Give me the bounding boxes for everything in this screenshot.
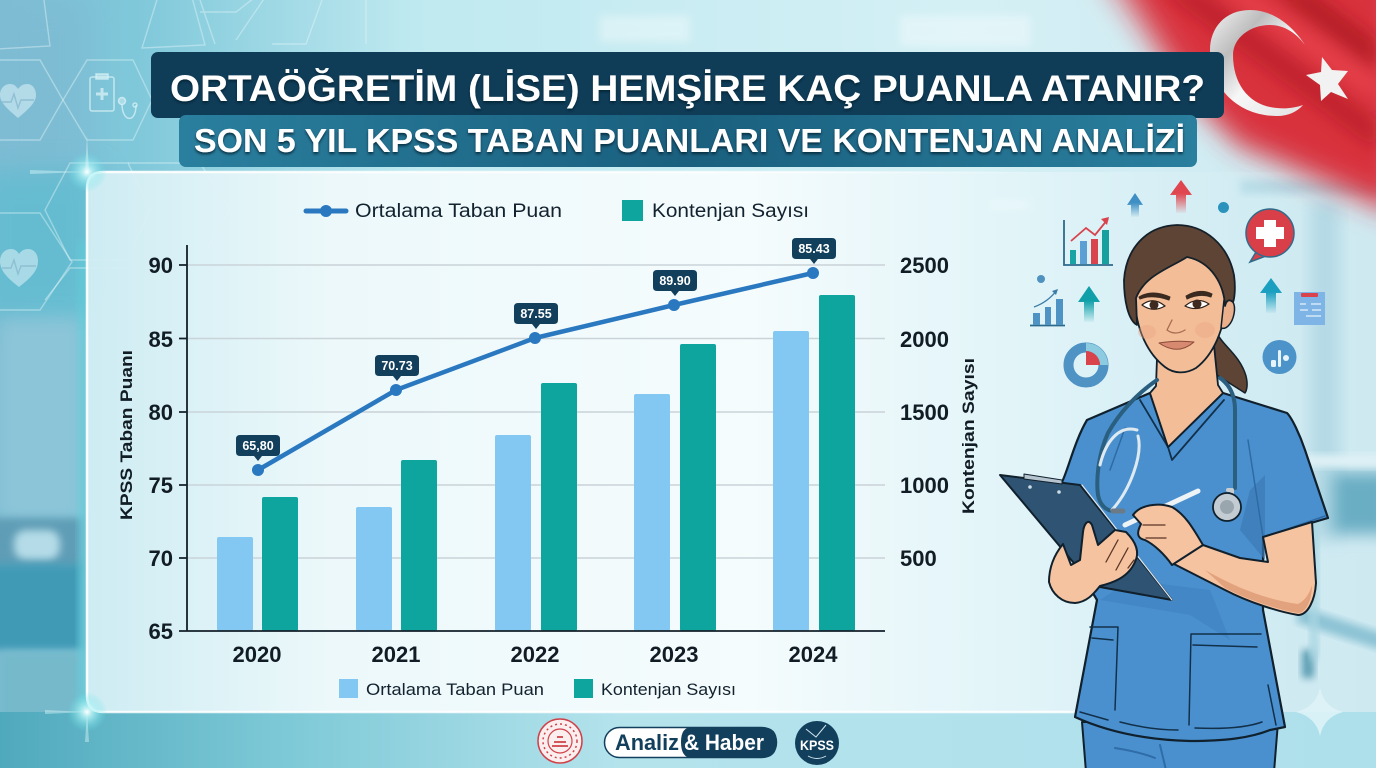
right axis title: Kontenjan Sayısı xyxy=(959,358,978,514)
logo: Analiz & Haber: Analiz xyxy=(615,730,679,755)
right axis values: 500 xyxy=(900,546,937,571)
left axis values: 70 xyxy=(149,546,173,571)
year labels: 2020 xyxy=(233,642,281,667)
bars: 2022 xyxy=(495,383,577,631)
top legend: Ortalama Taban Puan xyxy=(355,201,562,222)
hexagon medical pattern xyxy=(0,0,366,310)
icon: report document xyxy=(1294,292,1325,325)
chart panel xyxy=(30,135,1297,742)
pen xyxy=(1125,491,1198,525)
ponytail xyxy=(1211,333,1247,393)
floating analytics icons xyxy=(1030,180,1325,382)
facial features xyxy=(1138,291,1215,349)
bottom legend: Kontenjan Sayısı xyxy=(601,680,736,699)
value callouts: 85.43 xyxy=(798,242,830,256)
left axis values: 75 xyxy=(149,473,173,498)
collar xyxy=(1140,393,1224,460)
left axis values xyxy=(149,253,173,644)
logos xyxy=(538,719,839,765)
right axis values: 2500 xyxy=(900,253,949,278)
title banner: ORTAÖĞRETİM (LİSE) HEMŞİRE KAÇ PUANLA ATANIR? xyxy=(170,68,1205,109)
bars: 2020 xyxy=(217,497,298,631)
icon: heart with pulse xyxy=(0,84,38,287)
logo: Analiz & Haber: & Haber xyxy=(684,730,764,755)
top legend: Kontenjan Sayısı xyxy=(652,201,809,222)
right axis values xyxy=(900,253,949,571)
stethoscope xyxy=(1097,378,1241,521)
pants xyxy=(1082,722,1278,768)
title banner xyxy=(151,52,1224,167)
right axis values: 1000 xyxy=(900,473,949,498)
top legend xyxy=(306,200,809,222)
scrub top xyxy=(1055,393,1328,741)
left axis values: 65 xyxy=(149,619,173,644)
writing hand xyxy=(1133,505,1203,565)
value callouts: 89.90 xyxy=(659,274,691,288)
sparkle xyxy=(1296,688,1343,736)
ear xyxy=(1221,299,1235,328)
year labels: 2021 xyxy=(372,642,420,667)
year labels: 2022 xyxy=(511,642,559,667)
icon: round data badge xyxy=(1262,340,1296,374)
nurse illustration xyxy=(1000,225,1328,768)
logo: KPSS badge: KPSS xyxy=(800,737,834,753)
year labels: 2023 xyxy=(650,642,698,667)
pockets xyxy=(1080,627,1276,730)
year labels: 2024 xyxy=(789,642,838,667)
value callouts: 87.55 xyxy=(520,307,552,321)
arm shading xyxy=(1205,570,1312,613)
icon: teal up arrow xyxy=(1078,286,1100,322)
logo: Analiz & Haber xyxy=(604,727,777,758)
neck and chest skin xyxy=(1150,345,1223,447)
crescent xyxy=(1210,10,1305,116)
bottom band xyxy=(0,712,1376,768)
bottom legend: Ortalama Taban Puan xyxy=(366,680,544,699)
left arm and hand xyxy=(1049,522,1137,603)
icon: donut chart xyxy=(1068,343,1108,382)
combo chart: scores and quotas xyxy=(117,238,978,667)
icon: small growth chart xyxy=(1030,275,1065,326)
left axis values: 90 xyxy=(149,253,173,278)
value callouts: 65,80 xyxy=(242,439,274,453)
value callouts xyxy=(236,238,836,461)
axes xyxy=(179,245,885,631)
left axis values: 80 xyxy=(149,400,173,425)
right arm xyxy=(1172,522,1316,615)
hair xyxy=(1124,225,1235,325)
bars: 2024 xyxy=(773,295,855,631)
logo: ministry seal xyxy=(538,719,582,763)
subtitle banner xyxy=(179,115,1197,167)
value callouts: 70.73 xyxy=(381,359,413,373)
icon: bar chart with red arrow xyxy=(1064,217,1113,265)
icon: cyan up arrow xyxy=(1260,278,1282,313)
score line xyxy=(252,267,819,476)
subtitle banner: SON 5 YIL KPSS TABAN PUANLARI VE KONTENJAN ANALİZİ xyxy=(194,122,1185,159)
star xyxy=(1306,57,1348,101)
bars: 2021 xyxy=(356,460,437,631)
face xyxy=(1135,256,1226,372)
Turkish flag xyxy=(1085,0,1376,215)
left axis values: 85 xyxy=(149,327,173,352)
logo: KPSS badge xyxy=(795,721,839,765)
left axis title: KPSS Taban Puanı xyxy=(117,350,136,520)
right axis values: 2000 xyxy=(900,327,949,352)
icon: medical speech bubble xyxy=(1246,209,1294,262)
icon: red up arrow xyxy=(1170,180,1192,213)
right axis values: 1500 xyxy=(900,400,949,425)
bars: 2023 xyxy=(634,344,716,631)
icon: clipboard and stethoscope xyxy=(90,74,137,118)
bottom legend xyxy=(339,679,736,699)
icon: blue up arrow xyxy=(1127,193,1143,217)
icon: dot xyxy=(1218,202,1229,213)
clipboard xyxy=(1000,474,1172,600)
year labels xyxy=(233,642,838,667)
